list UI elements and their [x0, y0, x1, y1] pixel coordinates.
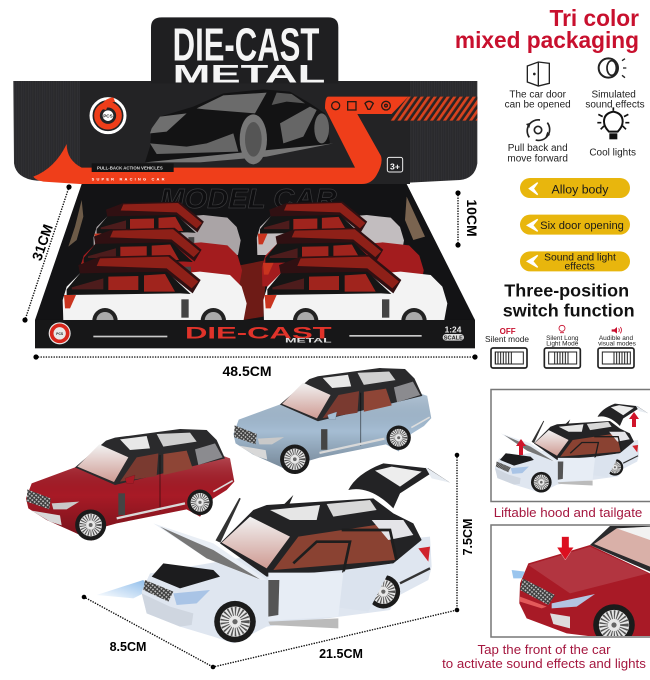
- lid hatch band: [390, 97, 477, 121]
- box top tab with title: [151, 17, 338, 88]
- switch: off: OFF: [500, 327, 516, 336]
- age 3+ icon: [387, 157, 403, 172]
- pill: sound and light effects: [520, 251, 630, 273]
- three car photos: [26, 368, 450, 643]
- box tray: [35, 183, 475, 333]
- switch: audible and visual: visual modes: [598, 341, 637, 348]
- feature: cool lights: Cool lights: [589, 147, 636, 158]
- pill: sound and light effects: Sound and light: [544, 252, 616, 263]
- panel: tap the front of the car: [442, 525, 650, 671]
- dimension: box depth 31CM: [22, 184, 72, 323]
- switch heading: [503, 280, 635, 320]
- caption: [442, 642, 646, 671]
- feature: pull back: move forward: [507, 153, 568, 164]
- caption: to activate sound effects and lights: [442, 656, 646, 671]
- box lid: [13, 81, 477, 184]
- feature: sound effects: Simulated: [591, 89, 636, 100]
- feature column: [485, 58, 645, 368]
- box front strip: 1:24: [445, 324, 462, 334]
- dimension: box height 10CM: [455, 190, 480, 248]
- dimension: car length 21.5CM: [213, 610, 457, 667]
- switch: silent long light: [544, 325, 580, 368]
- car: white SUV with doors open: [97, 463, 450, 643]
- box front strip: METAL: [285, 338, 332, 345]
- caption: Tap the front of the car: [477, 642, 611, 657]
- dimension: box width 48.5CM: [33, 354, 478, 379]
- dimension: car width 8.5CM: 8.5CM: [110, 640, 146, 654]
- feature: sound effects: [585, 58, 645, 111]
- lid small labels: [92, 163, 174, 181]
- lid small labels: SUPER RACING CAR: [92, 176, 167, 181]
- switch: off: Silent mode: [485, 334, 529, 344]
- red arrow: hood: [516, 439, 526, 455]
- silver cars, back row: [93, 202, 404, 264]
- feature: pull back: [507, 120, 568, 164]
- switch: silent long light: Silent Long: [546, 335, 579, 342]
- switch heading: switch function: [503, 300, 635, 320]
- product box: [13, 17, 477, 348]
- feature: pull back: Pull back and: [508, 143, 568, 154]
- lid small labels: PULL-BACK ACTION VEHICLES: [97, 166, 163, 171]
- red cars, middle row: [80, 228, 424, 297]
- dimension: car height 7.5CM: [455, 453, 475, 612]
- 6 PCS badge: [91, 97, 125, 133]
- caption: Liftable hood and tailgate: [494, 505, 642, 520]
- panel: liftable hood and tailgate: [491, 390, 650, 520]
- dimension: car length 21.5CM: 21.5CM: [319, 647, 363, 661]
- front badge: PCS: [56, 332, 64, 336]
- red arrow: press down: [557, 537, 574, 560]
- pill: sound and light effects: effects: [565, 262, 595, 273]
- box top tab with title: DIE-CAST: [173, 19, 319, 71]
- lid orange swoosh: [33, 97, 408, 184]
- pill: alloy body: Alloy body: [552, 182, 609, 196]
- red arrow: tailgate: [629, 412, 639, 427]
- box front strip: DIE-CAST: [185, 324, 332, 343]
- pill: six door opening: Six door opening: [540, 220, 624, 232]
- model car lettering: MODEL CAR: [160, 183, 337, 214]
- 6 PCS badge: PCS: [103, 113, 113, 118]
- feature: cool lights: [589, 107, 636, 158]
- box front strip: SCALE: [444, 335, 463, 341]
- pill: six door opening: [520, 215, 630, 235]
- switch: audible and visual: Audible and: [599, 335, 634, 342]
- close-up red hood: [519, 545, 650, 637]
- front badge: [49, 322, 71, 344]
- white cars, front row: [63, 255, 447, 333]
- product heading: [455, 5, 639, 53]
- product heading: mixed packaging: [455, 27, 639, 53]
- switch: audible and visual: [598, 327, 637, 368]
- car: red SUV: [26, 429, 234, 541]
- feature: car door: [505, 62, 571, 111]
- dimension: box depth 31CM: 31CM: [29, 222, 56, 263]
- age 3+ icon: 3+: [390, 161, 400, 171]
- box front strip: [35, 320, 475, 348]
- lid car silhouette: [145, 89, 333, 164]
- lid icons: [332, 101, 390, 110]
- car: blue SUV: [233, 368, 431, 474]
- product heading: Tri color: [549, 5, 639, 31]
- dimension: car width 8.5CM: [82, 595, 215, 669]
- box top tab with title: METAL: [173, 60, 325, 88]
- dimension: car height 7.5CM: 7.5CM: [461, 519, 475, 555]
- feature: sound effects: sound effects: [585, 100, 645, 111]
- switch: silent long light: Light Mode: [546, 341, 579, 348]
- feature: car door: The car door: [509, 89, 567, 100]
- dimension: box height 10CM: 10CM: [464, 199, 480, 237]
- switch: off: [485, 327, 529, 368]
- dimension: box width 48.5CM: 48.5CM: [222, 363, 272, 379]
- switch heading: Three-position: [504, 280, 629, 300]
- feature: car door: can be opened: [505, 100, 571, 111]
- pill: alloy body: [520, 178, 630, 198]
- small open car: [495, 404, 648, 493]
